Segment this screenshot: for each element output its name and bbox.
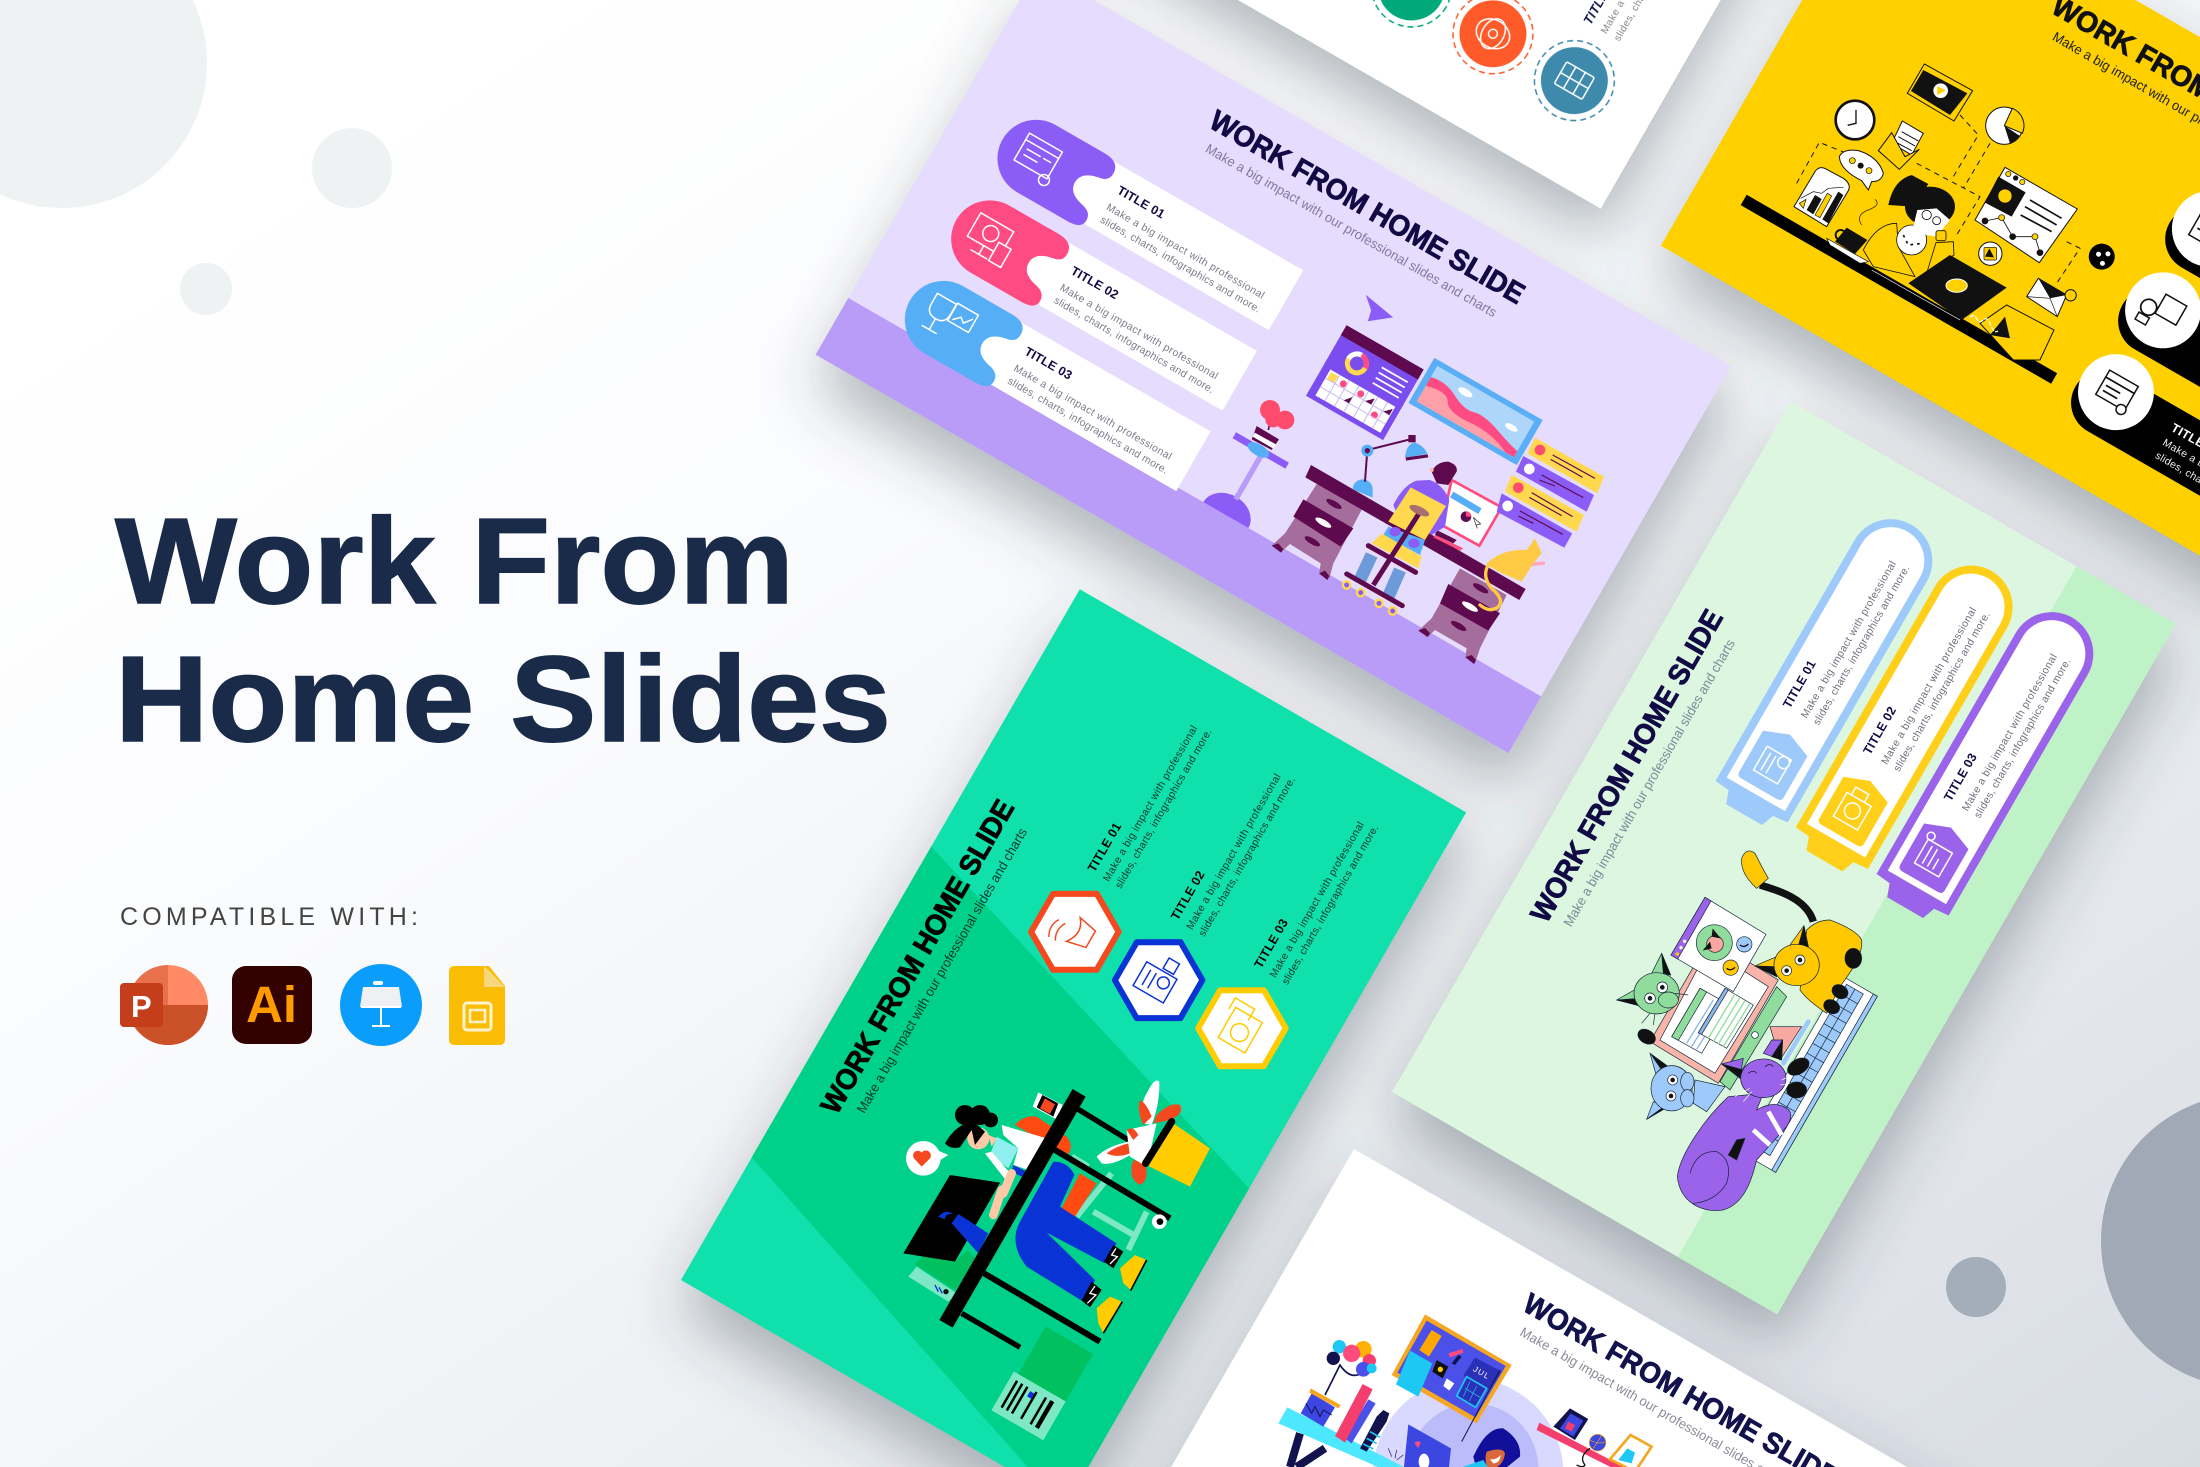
icon: green circle: [1357, 0, 1466, 42]
left pedestal: [1272, 482, 1363, 580]
woman: [1863, 175, 1955, 277]
item 01: [1020, 703, 1229, 989]
purple cat: [1677, 1040, 1812, 1211]
speech bubble: [1839, 150, 1883, 190]
chair seat: [1062, 1173, 1097, 1217]
item 02: slides, charts, infographics and more.: [1892, 610, 1993, 774]
item 01: slides, charts, infographics and more.: [1812, 564, 1912, 727]
person: [1463, 1428, 1520, 1467]
stand dot: [1752, 1032, 1758, 1038]
blue cat: [1647, 1053, 1725, 1119]
darker polygon: [681, 847, 1318, 1467]
books and bottle: [1335, 1384, 1389, 1452]
cat: [1480, 538, 1543, 610]
main title: Home Slides: [115, 631, 891, 767]
item 01: [1708, 504, 1948, 835]
illustration: landscape picture: [1408, 358, 1543, 465]
envelope with paper: [1878, 121, 1923, 169]
light green slide content: [1392, 401, 2176, 1314]
row 03: slides, charts, infographics and more.: [1005, 376, 1169, 477]
video player: [1907, 64, 1973, 121]
decorative circles top left: [0, 0, 392, 315]
right shelf: [1537, 1423, 1627, 1467]
row 01: slides, charts, infographics and more.: [1098, 215, 1262, 315]
icon: Illustrator: Ai: [246, 976, 297, 1033]
right pedestal: [1418, 568, 1507, 664]
item 02: TITLE 02: [1168, 868, 1208, 922]
clock: [1836, 101, 1874, 139]
network node: [2084, 239, 2119, 274]
browser window: [1975, 167, 2077, 263]
item 03: [1869, 597, 2109, 928]
row 03: Make a big impact with professional: [1012, 363, 1173, 463]
panel: light green slide: [1392, 401, 2176, 1314]
item 03: Make a big impact with professional: [1961, 652, 2060, 813]
slide title: WORK FROM HOME SLIDE: [1204, 105, 1530, 311]
illustration: woman working with floating apps: [1794, 64, 2080, 360]
floor band: [816, 298, 1541, 753]
can: [1033, 1092, 1063, 1119]
slide subtitle: Make a big impact with our professional slides and charts: [854, 825, 1030, 1116]
item 03: TITLE 03: [1941, 751, 1980, 804]
row 01: TITLE 01: [1115, 183, 1167, 222]
purple slide content: [816, 0, 1731, 753]
item 03: [1187, 799, 1396, 1085]
item 02: TITLE 02: [1861, 704, 1899, 757]
icon: Google Slides: [449, 966, 505, 1045]
white slide content: [1130, 1149, 2047, 1467]
illustration: person at standing desk: [903, 1081, 1210, 1347]
socks and shoes: [1082, 1245, 1147, 1333]
heart bubble: [906, 1141, 948, 1176]
row 02: slides, charts, infographics and more.: [1052, 295, 1216, 396]
item 02: [1104, 751, 1313, 1037]
note cards: [1497, 438, 1604, 548]
yellow cat: [1742, 851, 1862, 1017]
slide title: WORK FROM HOME SLIDE: [815, 794, 1021, 1120]
icon: teal circle: [1520, 26, 1629, 135]
item 01: Make a big impact with professional: [1800, 559, 1899, 720]
item 02: slides, charts, infographics and more.: [1197, 775, 1298, 939]
laptop: [1388, 1424, 1451, 1467]
teal slide content: [681, 589, 1466, 1467]
row 02 pill and circle: [2106, 258, 2200, 532]
box: [1980, 305, 2054, 360]
panel: white slide top: [908, 0, 1825, 208]
panel: white slide bottom: [1130, 1149, 2047, 1467]
video call card: [1671, 897, 1766, 992]
left table: [1278, 1407, 1403, 1467]
row 03: TITLE 03: [1022, 344, 1075, 383]
chair: [1343, 487, 1446, 615]
laptop: [1872, 255, 2007, 320]
row 01: [983, 106, 1304, 335]
item 01: Make a big impact with professional: [1102, 724, 1200, 884]
illustration: paper plane: [1355, 295, 1396, 331]
backpack: [1015, 1116, 1071, 1157]
compatible with label: COMPATIBLE WITH:: [120, 903, 418, 931]
table: [939, 1089, 1170, 1347]
plant: [1097, 1081, 1210, 1187]
keyboard: [1741, 976, 1877, 1172]
stylus and pink shape: [1770, 1022, 1808, 1063]
row 01: Make a big impact with professional: [1104, 202, 1266, 302]
illustration: cats on a computer: [1617, 851, 1877, 1211]
wall board: JUL: [1472, 1365, 1491, 1381]
coffee cup: [1827, 199, 1877, 263]
yellow slide content: [1661, 0, 2200, 659]
slide title: WORK FROM HOME SLIDE: [1525, 605, 1730, 928]
main title: Work From: [115, 493, 794, 629]
slide shadows: [681, 0, 2200, 1467]
text column 03: [1581, 0, 1713, 43]
green cat: [1617, 953, 1688, 1047]
panel: teal slide: [681, 589, 1466, 1467]
item 03: slides, charts, infographics and more.: [1973, 657, 2074, 820]
tablet: [1650, 938, 1778, 1083]
row 02: TITLE 02: [1068, 264, 1121, 302]
person: [1360, 462, 1457, 597]
icon: orange circle: [1438, 0, 1548, 88]
play badge: [1979, 242, 2002, 265]
slide subtitle: Make a big impact with our professional slides and charts: [1203, 141, 1500, 320]
main title: [115, 493, 891, 767]
row 01 pill and circle: [2153, 177, 2200, 450]
item 02: Make a big impact with professional: [1185, 772, 1284, 932]
envelope small: [2027, 278, 2076, 317]
panel: yellow slide: [1661, 0, 2200, 659]
wall board: [1392, 1314, 1512, 1442]
icon: PowerPoint: P: [131, 989, 152, 1024]
illustration: box and barcode panel: [991, 1324, 1093, 1440]
darker band: [1678, 566, 2176, 1314]
tablet stand: [1720, 987, 1787, 1090]
pie chart: [1986, 107, 2024, 144]
row 02: [937, 186, 1258, 416]
slide subtitle: Make a big impact with our professional slides and charts: [1561, 636, 1738, 929]
green pad and panel: [908, 1250, 977, 1302]
vase and flower: [1245, 400, 1294, 461]
vase and flower: [1301, 1340, 1377, 1427]
item 02: Make a big impact with professional: [1880, 606, 1979, 767]
illustration: home office: [1278, 1314, 1652, 1467]
decorative circles bottom right: [1946, 1094, 2200, 1388]
row 03 pill, circle and text: [2059, 340, 2200, 614]
desk bar: [1741, 195, 2057, 384]
item 03: slides, charts, infographics and more.: [1280, 823, 1381, 987]
item 01: slides, charts, infographics and more.: [1114, 727, 1215, 891]
desk slab: [1305, 465, 1526, 600]
dashed connector lines: [1797, 115, 2080, 283]
monitor: [1433, 480, 1502, 551]
pants: [1015, 1162, 1117, 1302]
person upper body: [945, 1105, 1047, 1215]
bar chart document: [1794, 168, 1849, 227]
item 03: Make a big impact with professional: [1268, 820, 1367, 980]
illustration: person at desk: [1245, 400, 1604, 664]
item 01: TITLE 01: [1085, 820, 1124, 874]
background arcs: [1373, 1378, 1563, 1467]
row 02: Make a big impact with professional: [1058, 283, 1220, 382]
shelf objects: [1553, 1408, 1652, 1467]
icon: Keynote: [340, 964, 422, 1046]
icon: PowerPoint: [120, 965, 208, 1045]
item 01: TITLE 01: [1780, 658, 1819, 711]
item 03: TITLE 03: [1252, 916, 1291, 971]
chair: [1072, 1157, 1147, 1250]
illustration: wall board: [1306, 325, 1424, 440]
item 02: [1788, 550, 2028, 882]
illustration: plant stand: [1198, 432, 1289, 529]
icon: Illustrator: [232, 966, 312, 1044]
lamp: [1353, 435, 1428, 498]
row 03: [891, 267, 1212, 496]
panel: purple slide: [816, 0, 1731, 753]
laptop: [903, 1175, 1000, 1262]
cable coil: [1970, 316, 1998, 332]
